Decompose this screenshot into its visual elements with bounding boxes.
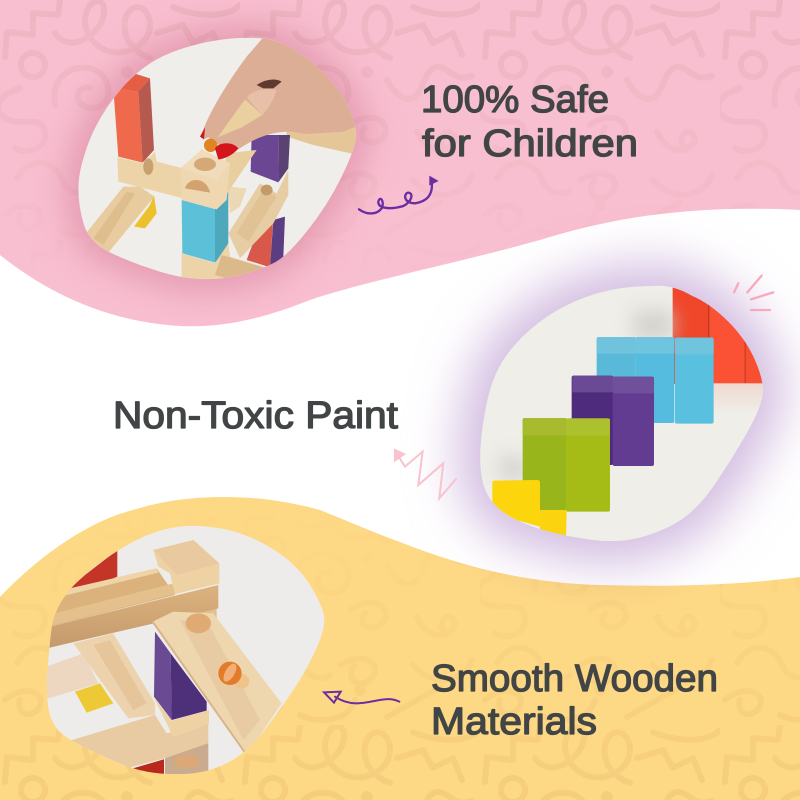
red blocks	[673, 287, 768, 384]
bottom red and wood	[133, 743, 208, 777]
heading: Smooth Wooden Materials: Materials	[431, 701, 597, 743]
panel: pink top section	[0, 0, 800, 340]
floor reflection	[714, 383, 763, 404]
left rail	[87, 186, 154, 252]
lower red and purple blocks	[247, 217, 285, 267]
bottom wood piece	[182, 243, 264, 279]
top beam	[47, 568, 218, 648]
center rail	[217, 150, 257, 209]
panel: yellow bottom section	[0, 490, 800, 800]
arrow: pink zigzag arrow	[394, 448, 457, 498]
marble	[204, 139, 217, 152]
purple block	[154, 632, 207, 720]
icon: pink rays	[734, 276, 773, 310]
right rail	[228, 170, 288, 258]
horizontal wood rail	[117, 152, 183, 198]
arrow: purple wavy arrow	[324, 692, 399, 703]
left horizontal rail	[43, 653, 98, 700]
heading: Non-Toxic Paint: Non-Toxic Paint	[113, 395, 398, 437]
rail held between fingers	[218, 99, 262, 137]
wood bar behind hand	[287, 127, 360, 154]
lower beam	[63, 697, 209, 768]
red block	[113, 73, 154, 163]
photo: painted colored blocks	[480, 286, 763, 541]
blue block	[182, 192, 228, 263]
arrow: purple looping arrow	[359, 176, 439, 213]
hand	[202, 37, 360, 149]
photo: hand placing a marble on wooden blocks	[78, 38, 356, 280]
yellow block	[75, 683, 113, 713]
heading: 100% Safe for Children	[421, 79, 638, 165]
heading: Smooth Wooden Materials	[431, 658, 718, 743]
green blocks	[523, 418, 610, 512]
heading: Smooth Wooden Materials: Smooth Wooden	[431, 658, 718, 700]
purple blocks	[572, 376, 654, 466]
yellow blocks	[492, 480, 567, 538]
red block top	[70, 551, 118, 590]
post behind	[199, 608, 217, 618]
purple upper block	[251, 135, 290, 182]
yellow block	[134, 195, 157, 228]
shadows	[500, 310, 673, 480]
rail behind center	[228, 187, 247, 213]
purple glow behind middle photo	[480, 286, 763, 541]
mid diagonal rail	[73, 633, 155, 718]
photo: smooth wooden rails with marble	[46, 526, 324, 774]
soft shadow behind top photo	[78, 38, 356, 279]
heading: 100% Safe for Children: for Children	[422, 123, 638, 165]
red fingernails	[200, 127, 238, 159]
orange marble	[218, 662, 249, 689]
center wood cube	[181, 149, 230, 209]
blue blocks	[597, 337, 714, 424]
beam end cap	[153, 540, 219, 594]
heading: 100% Safe for Children: 100% Safe	[421, 79, 609, 121]
diagonal rail with marble	[153, 612, 282, 755]
